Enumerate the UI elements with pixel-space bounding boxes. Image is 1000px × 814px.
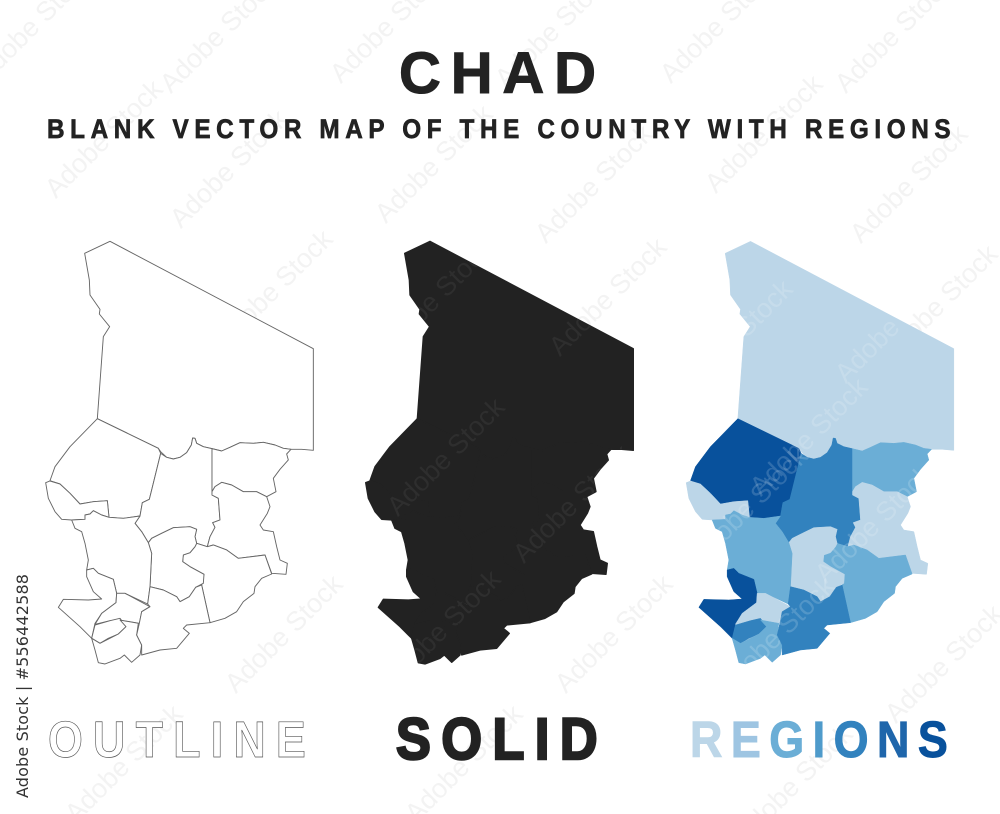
regions map watermark [718,282,918,664]
region: east [848,482,928,574]
label: outline: OUTLINE [48,712,306,769]
watermark pattern: Adobe Stock [529,119,659,248]
solid map watermark: Adobe Stock [381,392,511,521]
regions map watermark: Adobe Stock [711,571,841,700]
watermark pattern: Adobe Stock [219,569,349,698]
solid map watermark: Adobe Stock [369,234,499,363]
solid map watermark: Adobe Stock [377,564,507,693]
region: lake [686,481,749,520]
region: west [712,511,792,604]
watermark pattern: Adobe Stock [209,224,339,353]
watermark pattern: Adobe Stock [844,119,974,248]
region: south-centre small [735,593,790,624]
region: far south [732,620,782,664]
region: south [777,585,850,655]
watermark pattern: Adobe Stock [699,69,829,198]
solid map watermark: Adobe Stock [507,439,637,568]
map: solid [366,241,633,664]
title: CHAD [399,41,596,106]
map: outline [46,241,313,664]
region: north [725,241,954,459]
watermark pattern: Adobe Stock [369,99,499,228]
region: southeast [823,543,912,623]
region: central north [775,438,860,547]
map: regions [686,241,954,664]
stock credit: Adobe Stock | #556442588 [13,574,32,798]
watermark pattern: Adobe Stock [543,232,673,361]
regions map watermark: Adobe Stock [684,441,814,570]
label: solid: SOLID [396,706,598,772]
watermark pattern: Adobe Stock [549,569,679,698]
region: centre [789,527,844,602]
regions map watermark: Adobe Stock [669,274,799,403]
solid map watermark: Adobe Stock [543,232,673,361]
watermark pattern: Adobe Stock [164,104,294,233]
region: southwest [699,568,757,638]
regions map watermark: Adobe Stock [829,259,959,388]
subtitle: BLANK VECTOR MAP OF THE COUNTRY WITH REGIONS [47,115,951,144]
watermark pattern: Adobe Stock [874,239,1000,368]
regions map watermark: Adobe Stock [809,459,939,588]
watermark pattern: Adobe Stock [39,74,169,203]
label: regions: REGIONS [690,712,948,769]
regions map watermark: Adobe Stock [744,372,874,501]
region: northeast [852,442,931,497]
region: northwest [690,419,801,518]
region: south small [732,618,766,643]
watermark pattern: Adobe Stock [49,369,179,498]
solid map watermark [390,262,622,662]
